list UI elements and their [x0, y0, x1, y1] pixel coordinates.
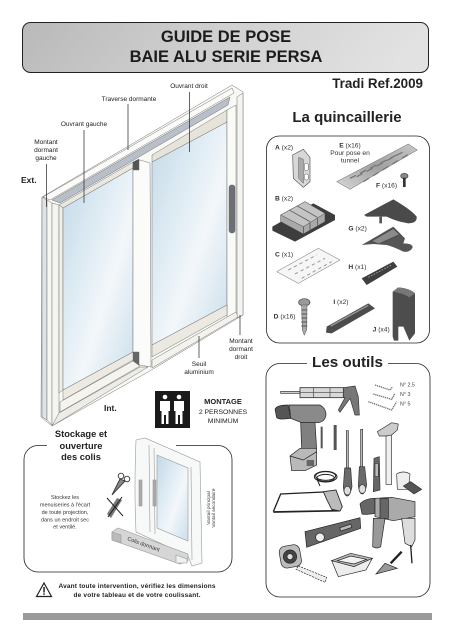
window illustration — [41, 85, 243, 426]
tool: hammer drill — [360, 497, 415, 563]
stockage text: et ventilé. — [53, 524, 77, 530]
part A: A (x2) — [275, 144, 293, 151]
tool: screwdrivers — [343, 429, 367, 496]
part E: Pour pose en — [330, 150, 370, 157]
stockage heading: des colis — [61, 452, 101, 462]
label: interior: Int. — [104, 403, 117, 413]
label: traverse dormante: Traverse dormante — [102, 96, 157, 103]
wrapped window packages — [112, 438, 202, 566]
tool: cordless drill — [275, 405, 326, 471]
label: seuil aluminium: aluminium — [184, 369, 214, 376]
part E — [330, 143, 417, 189]
tool: bucket and float — [397, 472, 422, 494]
panel: stockage — [24, 429, 232, 572]
reference label: Tradi Ref.2009 — [332, 76, 423, 91]
label: seuil aluminium: Seuil — [192, 361, 207, 368]
stockage text: dans un endroit sec — [41, 518, 89, 524]
part I: I (x2) — [333, 299, 349, 306]
vertical labels: Vantail principal — [206, 491, 212, 525]
icon: crossed out cutter — [107, 497, 123, 518]
stockage text: de toute projection, — [42, 510, 89, 516]
tool: wire coil — [314, 471, 337, 486]
part G: G (x2) — [348, 226, 367, 233]
part D: D (x16) — [274, 313, 295, 320]
part D — [274, 299, 310, 335]
stockage text — [40, 495, 91, 530]
label: traverse dormante — [102, 96, 157, 150]
title banner — [22, 22, 428, 72]
label: montant dormant droit: Montant — [229, 338, 253, 345]
tool: level — [305, 518, 361, 547]
tool: tray — [332, 553, 372, 577]
tool: hex keys: N° 3 — [400, 392, 410, 398]
label: ouvrant gauche — [61, 121, 108, 203]
icon: two people — [155, 391, 190, 428]
montage note: MINIMUM — [208, 418, 239, 425]
label: montant dormant droit: dormant — [229, 346, 253, 353]
tool: hex keys — [368, 383, 415, 410]
montage note: 2 PERSONNES — [199, 409, 248, 416]
icon: scissors — [112, 473, 130, 495]
montage note — [199, 397, 248, 425]
icon: warning triangle — [36, 583, 52, 596]
label: montant dormant gauche: gauche — [35, 155, 57, 162]
vertical labels: Vantail secondaire — [211, 488, 217, 528]
label: ouvrant droit: Ouvrant droit — [170, 83, 208, 90]
tool: hacksaw — [273, 490, 342, 512]
warning — [36, 583, 216, 599]
panel: quincaillerie — [266, 136, 430, 343]
vertical labels — [206, 488, 217, 528]
stockage heading — [55, 429, 107, 462]
stockage heading: ouverture — [60, 441, 102, 451]
part C — [275, 248, 340, 283]
part I — [326, 299, 375, 333]
part E: tunnel — [341, 157, 360, 164]
heading: la quincaillerie: La quincaillerie — [292, 109, 402, 126]
footer bar — [23, 613, 432, 620]
part C: C (x1) — [275, 252, 293, 259]
part F — [376, 173, 408, 189]
tool: hex keys: N° 2.5 — [400, 383, 415, 389]
tool: drill bits — [321, 425, 337, 450]
heading: les outils: Les outils — [312, 354, 383, 371]
tool: trowel — [376, 552, 402, 574]
tool: cutter — [373, 457, 380, 492]
label: ouvrant gauche: Ouvrant gauche — [61, 121, 108, 128]
part G — [348, 199, 417, 252]
part J: J (x4) — [373, 327, 390, 334]
stockage text: menuiseries à l'écart — [40, 502, 91, 508]
panel: outils — [266, 354, 430, 597]
stockage text: Stockez les — [51, 495, 79, 501]
part B — [272, 196, 335, 242]
label: montant dormant gauche — [34, 139, 58, 207]
part B: B (x2) — [275, 196, 293, 203]
label: montant dormant gauche: Montant — [34, 139, 58, 146]
stockage heading: Stockage et — [55, 429, 107, 439]
part H: H (x1) — [348, 264, 366, 271]
part E: E (x16) — [339, 143, 361, 150]
warning: de votre tableau et de votre coulissant. — [74, 592, 201, 599]
colis dormant box: Colis dormant — [126, 536, 161, 554]
part J — [373, 287, 415, 341]
warning: Avant toute intervention, vérifiez les dimensions — [58, 583, 216, 590]
part H — [348, 262, 397, 285]
label: exterior: Ext. — [21, 175, 37, 185]
title banner: BAIE ALU SERIE PERSA — [130, 48, 322, 66]
label: seuil aluminium — [184, 336, 214, 376]
title banner: GUIDE DE POSE — [161, 28, 291, 46]
part A — [275, 144, 310, 187]
tool: caulking gun — [281, 386, 359, 415]
label: montant dormant droit — [229, 315, 253, 361]
part F: F (x16) — [376, 182, 397, 189]
label: montant dormant gauche: dormant — [34, 147, 58, 154]
tool: hammer — [377, 423, 398, 484]
label: ouvrant droit — [170, 83, 208, 152]
label: montant dormant droit: droit — [235, 354, 248, 361]
tool: hex keys: N° 5 — [400, 401, 410, 407]
montage note: MONTAGE — [204, 397, 242, 406]
tool: tape measure — [278, 544, 327, 582]
